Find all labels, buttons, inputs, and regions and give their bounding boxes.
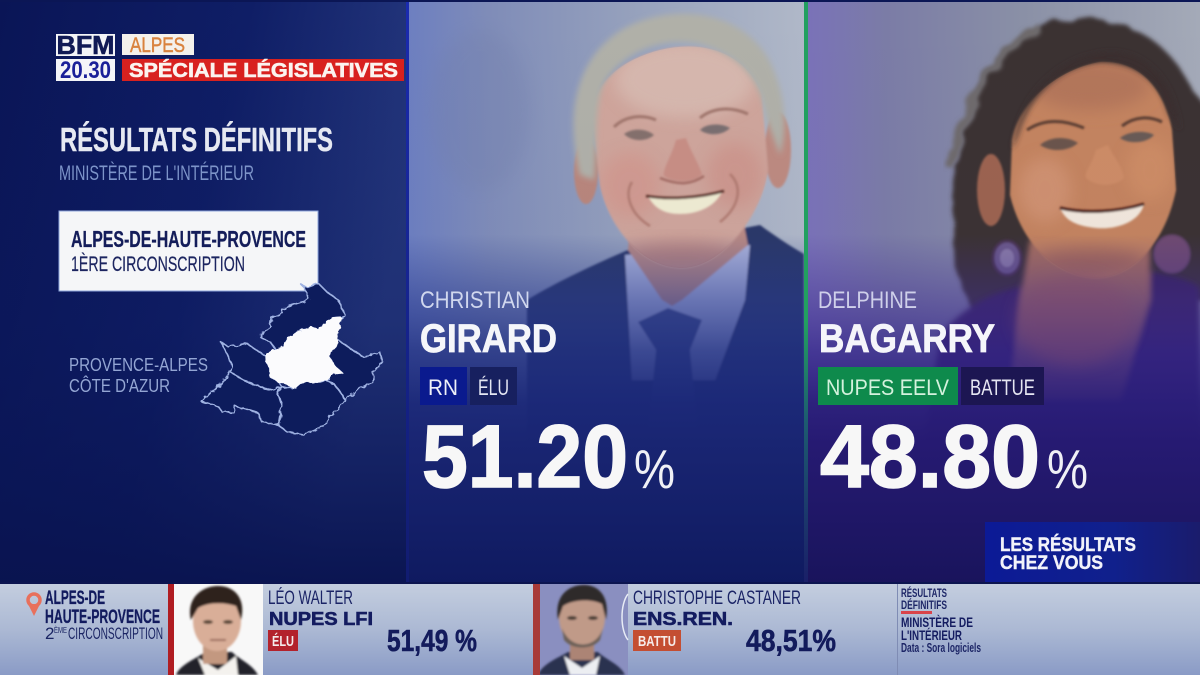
department: Bouches-du-Rhône [202, 372, 282, 425]
hair [574, 14, 784, 180]
divider: blue [406, 2, 409, 583]
ticker: location: 2 [45, 624, 54, 643]
status badge: battue: BATTUE [970, 375, 1035, 400]
first name: CHRISTIAN [420, 287, 530, 314]
status badge: battue [961, 367, 1044, 405]
ticker: source note [897, 584, 981, 675]
ticker: location [28, 588, 163, 643]
ticker: candidate Léo Walter: 51,49 % [387, 623, 477, 658]
department: Vaucluse [221, 342, 282, 390]
panel: candidate Delphine Bagarry [808, 2, 1200, 600]
ticker: candidate Christophe Castaner: BATTU [638, 633, 676, 650]
divider: green [804, 2, 808, 583]
score: 48.80%: % [1047, 438, 1088, 500]
last name: GIRARD [420, 317, 557, 361]
ticker: candidate Christophe Castaner: 48,51% [746, 623, 836, 658]
head [977, 62, 1176, 278]
department: Var [277, 381, 345, 435]
first name: DELPHINE [818, 287, 917, 314]
hair, back layer [951, 18, 1200, 330]
ticker: source note: Data : Sora logiciels [901, 640, 981, 655]
channel logo: BFM Alpes 20.30: 20.30 [60, 57, 111, 84]
portrait: Delphine Bagarry [935, 14, 1200, 398]
panel: left results column [0, 2, 407, 583]
ticker: source note: DÉFINITIFS [901, 599, 947, 612]
promo box: les résultats chez vous: CHEZ VOUS [1000, 553, 1103, 574]
region label [69, 355, 208, 396]
ticker: source note: MINISTÈRE DE [901, 614, 973, 630]
head [574, 46, 791, 268]
earrings [993, 235, 1190, 275]
ticker: location: HAUTE-PROVENCE [45, 607, 160, 628]
party badge: NUPES EELV: NUPES EELV [826, 375, 949, 400]
channel logo: BFM Alpes 20.30 [56, 30, 404, 84]
ticker: location: ÈME [54, 626, 67, 635]
ticker: candidate Christophe Castaner [533, 584, 836, 675]
portrait: Christian Girard [526, 12, 804, 394]
ticker: candidate Léo Walter: LÉO WALTER [268, 588, 353, 609]
facial features [1027, 118, 1162, 228]
channel logo: BFM Alpes 20.30: SPÉCIALE LÉGISLATIVES [129, 59, 398, 82]
ticker: candidate Léo Walter: NUPES LFI [269, 609, 373, 629]
source: ministère de l'intérieur: MINISTÈRE DE L'INTÉRIEUR [59, 162, 254, 185]
channel logo: BFM Alpes 20.30: ALPES [130, 34, 185, 57]
region label: PROVENCE-ALPES [69, 355, 208, 375]
department: Hautes-Alpes [262, 283, 345, 350]
department: Alpes-de-Haute-Provence (highlighted) [267, 318, 342, 388]
ticker: location: ALPES-DE [45, 588, 105, 609]
promo box: les résultats chez vous: LES RÉSULTATS [1000, 534, 1136, 556]
heading: résultats définitifs: RÉSULTATS DÉFINITIFS [60, 121, 333, 158]
status badge: élu: ÉLU [478, 375, 509, 400]
ticker: location: CIRCONSCRIPTION [68, 624, 163, 643]
party badge: RN [420, 367, 467, 405]
portrait: Léo Walter [176, 586, 258, 675]
status badge: élu [470, 367, 517, 405]
ticker: candidate Léo Walter: ÉLU [272, 633, 294, 650]
ticker: source note: L'INTÉRIEUR [901, 627, 962, 643]
ticker: source note: RÉSULTATS [901, 587, 947, 600]
portrait: Christophe Castaner [538, 585, 625, 675]
last name: BAGARRY [819, 317, 995, 361]
panel: candidate Christian Girard [409, 2, 804, 600]
constituency label box: 1ÈRE CIRCONSCRIPTION [71, 253, 245, 276]
region label: CÔTE D'AZUR [69, 375, 170, 396]
icon: map pin [28, 594, 40, 616]
ticker: candidate Léo Walter [168, 584, 477, 675]
ticker: candidate Christophe Castaner: ENS.REN. [633, 609, 733, 629]
bottom ticker banner [0, 582, 1200, 675]
constituency label box [59, 211, 318, 291]
fringe [1012, 60, 1170, 150]
facial features [614, 109, 748, 226]
score: 51.20%: % [634, 438, 675, 500]
score: 51.20%: 51.20 [422, 406, 628, 506]
map: Provence-Alpes-Côte d'Azur departments [202, 283, 383, 435]
neck and body [935, 238, 1200, 398]
channel logo: BFM Alpes 20.30: BFM [56, 30, 114, 60]
department: Alpes-Maritimes [327, 340, 383, 400]
score: 48.80%: 48.80 [820, 406, 1040, 506]
promo box: les résultats chez vous [985, 522, 1200, 583]
party badge: NUPES EELV [818, 367, 958, 405]
ticker: candidate Christophe Castaner: CHRISTOPHE CASTANER [633, 588, 801, 609]
party badge: RN: RN [428, 375, 458, 400]
constituency label box: ALPES-DE-HAUTE-PROVENCE [71, 226, 306, 252]
suit, shirt and tie [526, 224, 804, 394]
